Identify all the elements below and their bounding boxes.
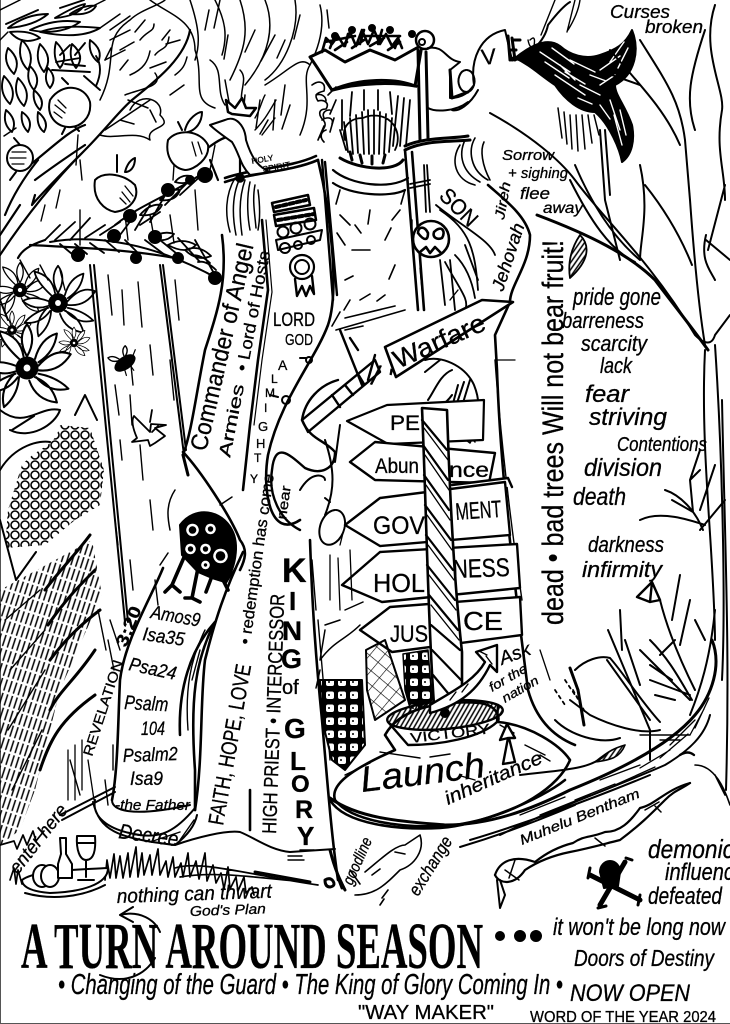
platform launch: Launch bbox=[358, 744, 487, 800]
armour legs bbox=[316, 602, 432, 770]
olive branch bbox=[45, 168, 221, 284]
text: curses broken bbox=[610, 2, 703, 37]
sign: holiness bbox=[342, 544, 520, 602]
text: Lord God Almighty: G bbox=[258, 419, 268, 434]
text: list of defeated things: death bbox=[573, 483, 626, 511]
figure hand and signpost bbox=[418, 359, 478, 443]
bare tree right bbox=[490, 5, 730, 790]
text: King of Glory: R bbox=[295, 796, 313, 824]
sword and horn: / ' bbox=[369, 360, 396, 394]
text: Revelation 3:20: REVELATION bbox=[80, 658, 126, 758]
text: scripture list: Amos9 bbox=[148, 602, 202, 632]
text: Revelation 3:20 bbox=[80, 603, 145, 758]
icon: keys on robe bbox=[160, 490, 240, 602]
tassel on left robe bbox=[227, 174, 260, 235]
text: goodline and exchange: goodline bbox=[340, 835, 376, 888]
text: King of Glory: L bbox=[290, 746, 306, 776]
text: list of defeated things: lack bbox=[600, 353, 633, 378]
text: list of defeated things: infirmity bbox=[582, 557, 664, 582]
central robe left panel bbox=[112, 156, 338, 880]
text: King of Glory: O bbox=[291, 771, 310, 798]
text: Muhelu Bentham signature: Muhelu Bentham bbox=[517, 785, 642, 848]
grass strip bbox=[0, 831, 342, 895]
robe shoe and hem bbox=[60, 787, 345, 890]
grapes bbox=[0, 395, 104, 580]
sign: holiness: HOL bbox=[373, 568, 425, 598]
crown bbox=[310, 25, 434, 90]
text: redemption has come near: near bbox=[273, 484, 294, 520]
text: Revelation 3:20: 3:20 bbox=[112, 603, 145, 649]
text: scripture list: Decree bbox=[117, 820, 180, 851]
text: scripture list: 104 bbox=[141, 719, 165, 740]
text: nothing can thwart God's Plan bbox=[116, 881, 273, 919]
text: sorrow and sighing flee away: Sorrow bbox=[502, 147, 555, 164]
text: demonic influence defeated bbox=[648, 834, 730, 910]
text: Lord God Almighty: I bbox=[264, 401, 267, 415]
dots after title bbox=[496, 931, 541, 941]
text: Son: SON bbox=[434, 183, 483, 232]
icon: apple centre left bbox=[95, 155, 136, 212]
flag pole and love banner bbox=[418, 0, 580, 140]
text: redemption has come near: • redemption has come bbox=[237, 473, 278, 646]
text: scripture list: Psalm bbox=[124, 692, 169, 716]
text: King of Glory: N bbox=[282, 616, 302, 646]
text: Jehovah Jireh: Jireh bbox=[491, 180, 514, 222]
text: Jehovah Jireh: Jehovah bbox=[487, 220, 528, 294]
text: King of Glory: I bbox=[289, 586, 296, 616]
text: list of defeated things: darkness bbox=[588, 532, 664, 557]
tree foliage top left bbox=[0, 0, 130, 136]
sign: justice bbox=[360, 597, 522, 652]
text: curses broken: Curses bbox=[610, 2, 670, 22]
text: Ask for the nation: Ask bbox=[496, 639, 535, 670]
platform launch: VICTORY bbox=[409, 720, 492, 746]
text: sorrow and sighing flee away: + sighing bbox=[508, 165, 569, 182]
text: Way Maker: "WAY MAKER" bbox=[358, 1002, 494, 1024]
text: Lord God Almighty: T bbox=[254, 451, 262, 465]
sign: abundance: Abun bbox=[375, 455, 419, 478]
text: list of defeated things: division bbox=[584, 454, 662, 482]
goodline river bbox=[350, 835, 421, 905]
text: King of Glory: of bbox=[282, 677, 299, 699]
sign: warfare: Warfare bbox=[388, 307, 490, 374]
sign: peace: PE bbox=[390, 412, 420, 435]
text: High Priest Intercessor: HIGH PRIEST • INTERCESSOR bbox=[259, 594, 289, 834]
text: redemption has come near bbox=[237, 473, 294, 646]
title arrow swoosh bbox=[100, 907, 160, 979]
text: Ask for the nation: for the bbox=[486, 661, 530, 695]
text: dead bad trees will not bear fruit: dead • bad trees Will not bear fruit! bbox=[537, 240, 570, 625]
text: scripture list: Psalm2 bbox=[122, 744, 179, 767]
text: list of defeated things: Contentions bbox=[617, 434, 707, 456]
text: list of defeated things: scarcity bbox=[581, 331, 649, 356]
sign: government bbox=[345, 478, 512, 546]
text: Lord God Almighty: LORD bbox=[273, 310, 315, 331]
text: Lord God Almighty: Y bbox=[250, 472, 258, 486]
text: Lord God Almighty bbox=[250, 310, 315, 486]
sword and horn bbox=[271, 330, 396, 545]
medal emblem bbox=[272, 195, 322, 296]
flag pole and love banner: V bbox=[480, 44, 498, 70]
text: King of Glory: G bbox=[284, 713, 306, 744]
text: King of Glory bbox=[281, 552, 314, 851]
king hair and beard bbox=[312, 82, 410, 330]
text: list of defeated things: barreness bbox=[562, 308, 644, 333]
text: King of Glory: G bbox=[281, 644, 302, 674]
sign: warfare bbox=[385, 300, 513, 377]
Holy Spirit label bbox=[251, 153, 291, 174]
snake bbox=[495, 783, 690, 908]
icon: skull and crossbones bbox=[588, 858, 640, 908]
Holy Spirit label: SPIRIT bbox=[262, 160, 291, 174]
Holy Spirit dove with crown bbox=[210, 95, 291, 175]
platform launch: inheritance bbox=[441, 748, 546, 810]
sunflowers bbox=[0, 263, 95, 433]
wheat grass bbox=[0, 535, 102, 845]
sign: abundance bbox=[350, 442, 495, 483]
text: list of defeated things bbox=[562, 284, 707, 582]
text: Now Open: NOW OPEN bbox=[570, 980, 691, 1007]
sign: abundance: nce bbox=[449, 459, 489, 482]
hatch under shoe and signs bbox=[330, 360, 550, 680]
icon: butterfly bbox=[132, 410, 166, 446]
sign: justice: CE bbox=[463, 606, 503, 636]
sign: government: MENT bbox=[455, 496, 503, 526]
Holy Spirit label: HOLY bbox=[251, 153, 275, 166]
tree canopy lines bbox=[100, 0, 329, 140]
icon: apple centre right bbox=[167, 112, 208, 170]
text: Jehovah Jireh bbox=[487, 180, 528, 294]
text: nothing can thwart God's Plan: God's Plan bbox=[190, 900, 266, 919]
text: sorrow and sighing flee away bbox=[502, 147, 584, 217]
sign: justice: JUS bbox=[390, 621, 428, 648]
icon: bee bbox=[108, 342, 144, 378]
text: sorrow and sighing flee away: away bbox=[543, 200, 584, 217]
text: King of Glory: K bbox=[282, 552, 307, 590]
text: nothing can thwart God's Plan: nothing can thwart bbox=[116, 881, 273, 908]
text: Lord God Almighty: GOD bbox=[285, 332, 313, 349]
text: Ask for the nation bbox=[486, 639, 541, 706]
platform launch bbox=[330, 696, 570, 828]
text: list of defeated things: fear bbox=[585, 381, 630, 408]
text: sorrow and sighing flee away: flee bbox=[520, 184, 550, 203]
icon: bread and wine plate bbox=[22, 836, 108, 897]
text: scripture list: Psa24 bbox=[127, 654, 178, 685]
signpost pole bbox=[422, 408, 462, 705]
text: Lord God Almighty: M bbox=[265, 386, 275, 400]
ask arrow bbox=[430, 645, 497, 713]
text: scripture list: Isa9 bbox=[130, 769, 163, 790]
text: Lord God Almighty: H bbox=[256, 436, 265, 451]
icon: hummingbird bbox=[512, 30, 636, 162]
text: Commander of Angel Armies: Commander of Angel bbox=[186, 241, 260, 453]
sign: peace bbox=[347, 400, 484, 444]
tree branches bbox=[0, 30, 240, 258]
text: list of defeated things: striving bbox=[589, 404, 668, 431]
text: King of Glory: Y bbox=[297, 821, 314, 851]
text: Commander of Angel Armies: Armies bbox=[215, 382, 248, 459]
text: Ask for the nation: nation bbox=[499, 673, 541, 706]
text: Lord God Almighty: A bbox=[278, 357, 288, 373]
text: list of defeated things: pride gone bbox=[572, 284, 661, 311]
sign: government: GOV bbox=[373, 512, 425, 540]
dirt path bbox=[330, 640, 730, 847]
text: Lord God Almighty: L bbox=[271, 372, 278, 386]
sign: holiness: NESS bbox=[452, 552, 510, 584]
text: Faith Hope Love: FAITH, HOPE, LOVE bbox=[203, 662, 256, 827]
right robe panel bbox=[405, 136, 575, 745]
text: curses broken: broken bbox=[645, 17, 703, 37]
text: goodline and exchange bbox=[340, 833, 456, 899]
text: scripture list: -the Father bbox=[115, 797, 191, 814]
text: scripture list bbox=[115, 602, 202, 851]
icon: small apple left bbox=[7, 138, 33, 180]
text: Commander of Angel Armies: • Lord of Hosts bbox=[232, 249, 274, 373]
text: goodline and exchange: exchange bbox=[404, 833, 456, 899]
text: scripture list: Isa35 bbox=[141, 624, 186, 651]
board fence bbox=[20, 190, 198, 805]
text: enter here: enter here bbox=[5, 801, 72, 878]
icon: apple top left bbox=[49, 78, 90, 134]
small dead tree bottom right bbox=[555, 575, 715, 760]
